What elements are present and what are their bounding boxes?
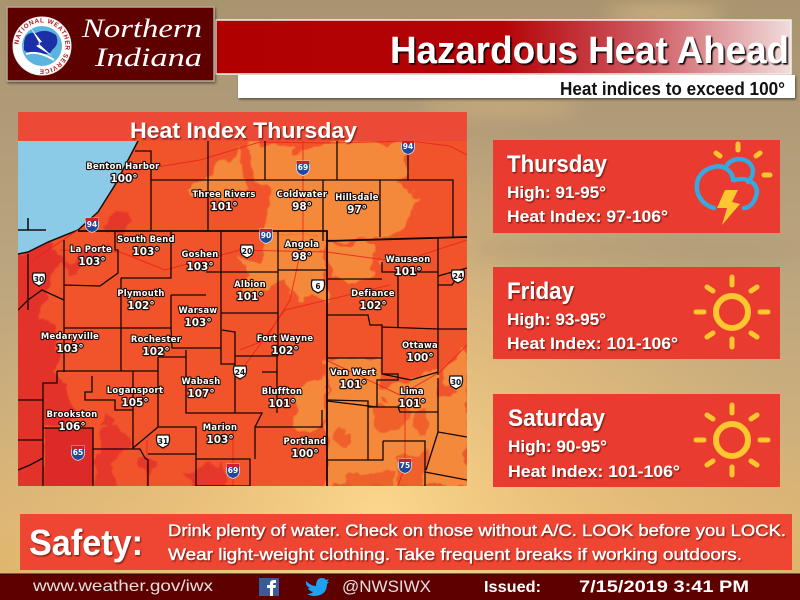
icon: sun, cloud and lightning: [697, 144, 770, 225]
panel: Friday forecast: Heat Index: 101-106°: [507, 334, 678, 353]
city labels and heat index values: 103°: [56, 343, 84, 355]
highway shields: 69: [298, 163, 308, 172]
city labels and heat index values: Angola: [285, 239, 319, 249]
panel: safety tips: Safety:: [29, 522, 143, 563]
city labels and heat index values: Portland: [284, 436, 326, 446]
city labels and heat index values: 100°: [110, 173, 138, 185]
highway shields: 75: [400, 461, 410, 470]
city labels and heat index values: Hillsdale: [335, 192, 379, 202]
city labels and heat index values: 101°: [339, 379, 367, 391]
city labels and heat index values: [41, 161, 438, 460]
city labels and heat index values: Benton Harbor: [86, 161, 160, 171]
city labels and heat index values: 101°: [394, 266, 422, 278]
panel: safety tips: Wear light-weight clothing. Take frequent breaks if working outdoors.: [168, 545, 742, 564]
city labels and heat index values: 103°: [206, 434, 234, 446]
city labels and heat index values: 106°: [58, 421, 86, 433]
highway shields: 94: [403, 142, 413, 151]
location name: [81, 14, 202, 72]
highway shields: [32, 140, 465, 478]
city labels and heat index values: La Porte: [70, 244, 112, 254]
footer bar: 7/15/2019 3:41 PM: [579, 577, 749, 596]
city labels and heat index values: 100°: [406, 352, 434, 364]
highway shields: 30: [451, 378, 461, 387]
city labels and heat index values: Ottawa: [402, 340, 438, 350]
panel: Saturday forecast: [493, 394, 780, 487]
city labels and heat index values: 102°: [127, 300, 155, 312]
highway shields: 69: [228, 466, 238, 475]
footer bar: [0, 574, 800, 600]
city labels and heat index values: Medaryville: [41, 331, 99, 341]
city labels and heat index values: 101°: [210, 201, 238, 213]
city labels and heat index values: Wabash: [182, 376, 220, 386]
lake michigan: [18, 141, 138, 254]
city labels and heat index values: 97°: [347, 204, 367, 216]
highway shields: 65: [73, 448, 83, 457]
city labels and heat index values: 102°: [271, 345, 299, 357]
panel: Thursday forecast: Thursday: [507, 151, 608, 178]
city labels and heat index values: Defiance: [351, 288, 395, 298]
city labels and heat index values: Goshen: [181, 249, 219, 259]
panel: Thursday forecast: Heat Index: 97-106°: [507, 207, 668, 226]
city labels and heat index values: 101°: [398, 398, 426, 410]
icon: facebook: [259, 578, 279, 596]
city labels and heat index values: 98°: [292, 201, 312, 213]
map title band: [18, 112, 467, 143]
city labels and heat index values: 102°: [142, 346, 170, 358]
city labels and heat index values: 101°: [236, 291, 264, 303]
map base: heat index shading: [18, 141, 467, 486]
location name: Northern: [81, 14, 202, 43]
panel: Friday forecast: High: 93-95°: [507, 310, 606, 329]
subtitle bar: [238, 75, 795, 99]
highways: [30, 141, 467, 486]
highway shields: 24: [235, 368, 245, 377]
city labels and heat index values: Van Wert: [330, 367, 376, 377]
city labels and heat index values: Rochester: [131, 334, 182, 344]
city labels and heat index values: 100°: [291, 448, 319, 460]
icon: twitter: [306, 578, 329, 596]
map title band: Heat Index Thursday: [130, 118, 358, 143]
location name: Indiana: [94, 43, 202, 72]
city labels and heat index values: 98°: [292, 251, 312, 263]
highway shields: 31: [158, 437, 168, 446]
highway shields: 20: [242, 247, 252, 256]
city labels and heat index values: 103°: [78, 256, 106, 268]
city labels and heat index values: 103°: [132, 246, 160, 258]
panel: safety tips: Drink plenty of water. Check on those without A/C. LOOK before you LOCK.: [168, 521, 786, 540]
city labels and heat index values: 101°: [268, 398, 296, 410]
city labels and heat index values: Brookston: [46, 409, 98, 419]
city labels and heat index values: 102°: [359, 300, 387, 312]
icon: sun: [696, 277, 768, 347]
panel: Friday forecast: [493, 267, 780, 359]
county lines: [18, 141, 467, 486]
city labels and heat index values: South Bend: [117, 234, 175, 244]
logo panel: Northern Indiana: [6, 6, 218, 85]
panel: Friday forecast: Friday: [507, 278, 575, 305]
footer bar: @NWSIWX: [342, 577, 431, 596]
panel: safety tips: [20, 514, 792, 570]
city labels and heat index values: Warsaw: [179, 305, 217, 315]
city labels and heat index values: 103°: [184, 317, 212, 329]
panel: Thursday forecast: [493, 140, 780, 233]
panel: Saturday forecast: Heat Index: 101-106°: [508, 462, 680, 481]
city labels and heat index values: 105°: [121, 397, 149, 409]
highway shields: 90: [261, 231, 271, 240]
city labels and heat index values: Lima: [400, 386, 424, 396]
city labels and heat index values: Bluffton: [262, 386, 302, 396]
highway shields: 30: [34, 275, 44, 284]
title bar: Hazardous Heat Ahead: [390, 30, 789, 72]
footer bar: www.weather.gov/iwx: [32, 578, 213, 595]
panel: Thursday forecast: High: 91-95°: [507, 183, 606, 202]
highway shields: 24: [453, 272, 463, 281]
map panel: heat index Thursday: [10, 112, 467, 495]
city labels and heat index values: 107°: [187, 388, 215, 400]
city labels and heat index values: Wauseon: [385, 254, 431, 264]
highway shields: 94: [87, 220, 97, 229]
city labels and heat index values: Plymouth: [117, 288, 165, 298]
city labels and heat index values: Marion: [203, 422, 237, 432]
subtitle bar: Heat indices to exceed 100°: [560, 79, 785, 99]
city labels and heat index values: Three Rivers: [192, 189, 256, 199]
panel: Saturday forecast: High: 90-95°: [508, 437, 607, 456]
icon: sun: [696, 405, 768, 475]
highway shields: 6: [315, 282, 321, 291]
city labels and heat index values: Logansport: [107, 385, 163, 395]
title bar: [216, 20, 791, 74]
city labels and heat index values: Coldwater: [277, 189, 328, 199]
footer bar: Issued:: [484, 579, 541, 596]
icon: NWS logo: NATIONAL WEATHER SERVICE: [14, 18, 70, 74]
city labels and heat index values: Fort Wayne: [257, 333, 313, 343]
panel: Saturday forecast: Saturday: [508, 405, 606, 432]
city labels and heat index values: 103°: [186, 261, 214, 273]
city labels and heat index values: Albion: [234, 279, 266, 289]
